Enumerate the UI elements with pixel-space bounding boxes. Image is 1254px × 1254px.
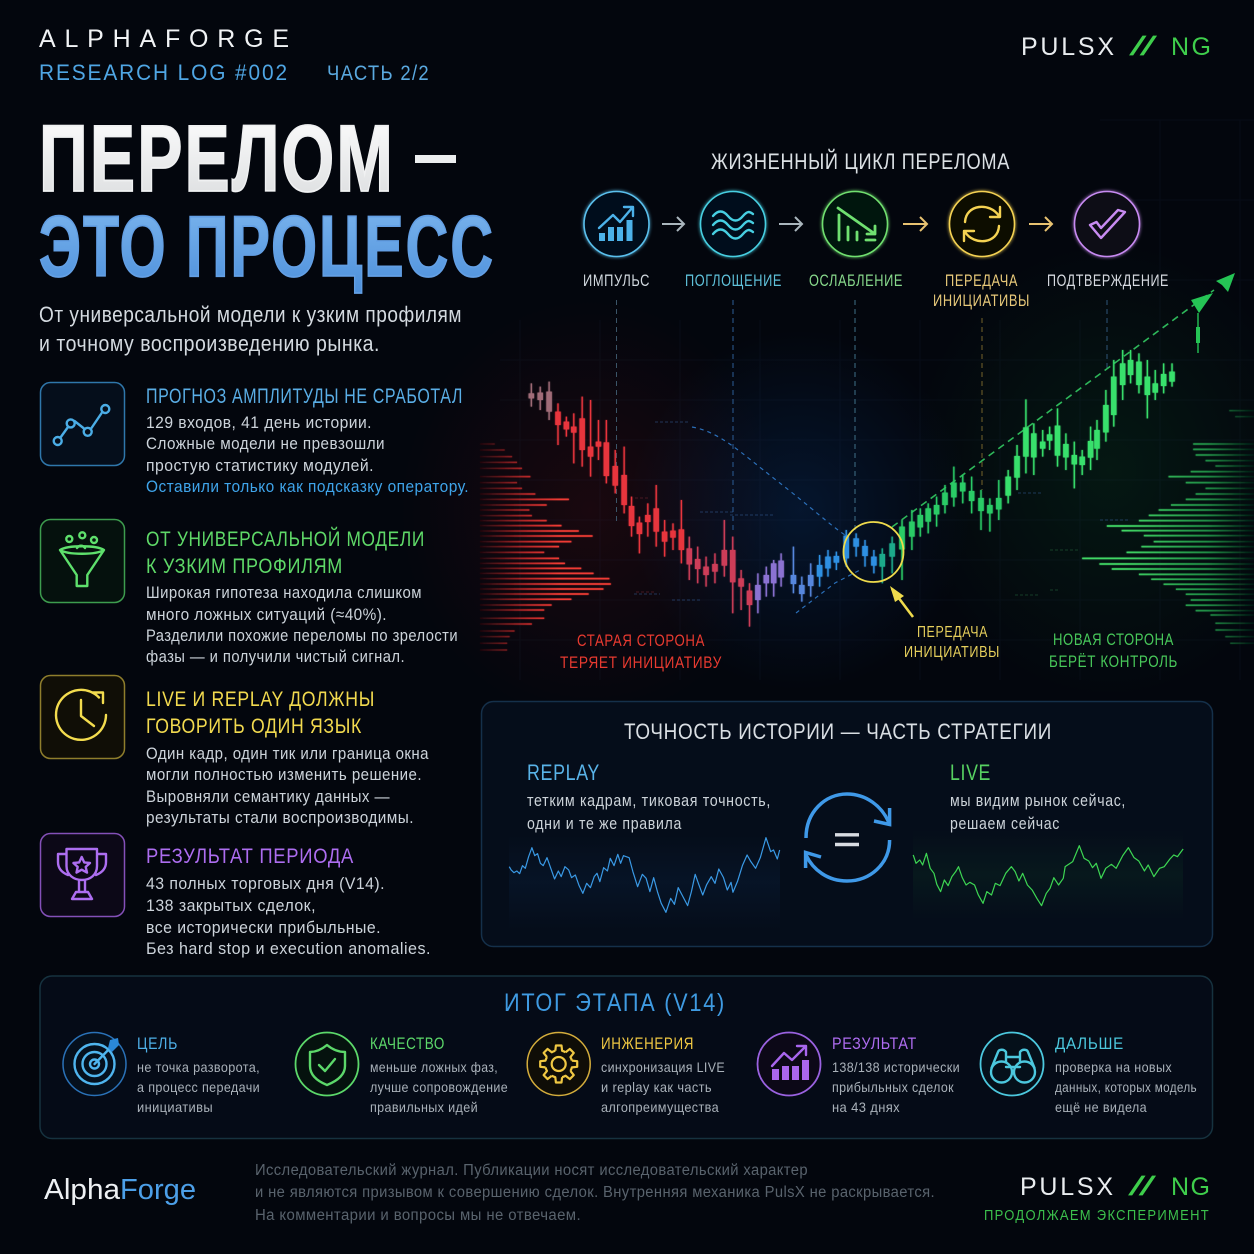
summary: next <box>980 1032 1197 1115</box>
brand name: ALPHAFORGE <box>39 25 289 53</box>
footer disclaimer: и не являются призывом к совершению сделок. Внутренняя механика PulsX не раскрывается. <box>255 1184 935 1201</box>
label: ИМПУЛЬС <box>583 271 650 290</box>
heading: ПРОГНОЗ АМПЛИТУДЫ НЕ СРАБОТАЛ <box>146 385 463 408</box>
panel: period result <box>40 834 431 958</box>
body text: Без hard stop и execution anomalies. <box>146 939 431 958</box>
heading: ГОВОРИТЬ ОДИН ЯЗЫК <box>146 715 362 738</box>
description <box>832 1059 960 1115</box>
body text <box>146 744 429 827</box>
body text: Выровняли семантику данных — <box>146 787 390 806</box>
icon: refresh <box>950 192 1014 256</box>
logo: PulsX NG bottom <box>1020 1171 1210 1201</box>
stage: weakening <box>809 192 903 290</box>
description: и replay как часть <box>601 1079 712 1095</box>
logo: PulsX NG bottom: PULSX <box>1020 1173 1113 1201</box>
icon: target <box>63 1032 126 1096</box>
heading: РЕЗУЛЬТАТ ПЕРИОДА <box>146 845 354 868</box>
description: синхронизация LIVE <box>601 1059 725 1075</box>
summary: quality <box>296 1032 508 1115</box>
label: handover: ИНИЦИАТИВЫ <box>904 644 1000 661</box>
icon: check <box>1074 192 1140 256</box>
panel heading: ТОЧНОСТЬ ИСТОРИИ — ЧАСТЬ СТРАТЕГИИ <box>624 719 1052 744</box>
panel: history accuracy <box>482 702 1212 946</box>
icon: falling bars <box>822 192 888 256</box>
replay column: одни и те же правила <box>527 814 682 833</box>
footer logo: AlphaForge: Forge <box>120 1174 196 1206</box>
panel: stage summary <box>40 976 1212 1138</box>
header: brand and log <box>39 25 430 85</box>
description <box>601 1059 725 1115</box>
main title: ПЕРЕЛОМ <box>39 106 395 212</box>
volume profile: green <box>1082 411 1254 643</box>
replay column: тетким кадрам, тиковая точность, <box>527 791 771 810</box>
icon: rising bars <box>584 192 649 256</box>
logo: PulsX NG top: // <box>1129 31 1157 61</box>
description: не точка разворота, <box>137 1059 260 1075</box>
stage guide lines <box>616 300 1107 532</box>
heading <box>146 527 425 578</box>
label: new side: НОВАЯ СТОРОНА <box>1053 630 1174 649</box>
icon: trophy <box>40 834 124 916</box>
subtitle: От универсальной модели к узким профилям <box>39 302 462 327</box>
body text: Широкая гипотеза находила слишком <box>146 583 422 602</box>
icon: growth chart <box>758 1032 820 1096</box>
label: ПОГЛОЩЕНИЕ <box>685 271 782 290</box>
chart: candlesticks with volume profiles <box>480 273 1254 650</box>
heading: К УЗКИМ ПРОФИЛЯМ <box>146 555 343 578</box>
icon: clock <box>40 676 124 758</box>
research log number: RESEARCH LOG #002 <box>39 60 289 85</box>
body text: 43 полных торговых дня (V14). <box>146 874 385 893</box>
stage: absorption <box>685 192 782 290</box>
body text <box>146 583 458 666</box>
title: РЕЗУЛЬТАТ <box>832 1034 917 1053</box>
summary heading: ИТОГ ЭТАПА (V14) <box>504 989 726 1017</box>
body text: все исторически прибыльные. <box>146 918 381 937</box>
body text: могли полностью изменить решение. <box>146 765 422 784</box>
title: ДАЛЬШЕ <box>1055 1034 1124 1053</box>
description: меньше ложных фаз, <box>370 1059 498 1075</box>
arrow <box>662 217 684 231</box>
arrow <box>903 217 927 231</box>
description: правильных идей <box>370 1099 478 1115</box>
heading <box>146 688 375 738</box>
body text: результаты стали воспроизводимы. <box>146 808 414 827</box>
faint readouts <box>634 422 1130 600</box>
live column: мы видим рынок сейчас, <box>950 791 1126 810</box>
arrow <box>779 217 802 231</box>
live column: LIVE <box>950 760 991 785</box>
label: old side <box>560 631 722 672</box>
description: данных, которых модель <box>1055 1079 1197 1095</box>
body text: много ложных ситуаций (≈40%). <box>146 605 387 624</box>
replay column: REPLAY <box>527 760 600 785</box>
body text: 138 закрытых сделок, <box>146 896 316 915</box>
description <box>137 1059 260 1115</box>
icon: line chart <box>40 382 124 466</box>
logo: PulsX NG bottom: NG <box>1171 1173 1210 1201</box>
label: ОСЛАБЛЕНИЕ <box>809 271 903 290</box>
description <box>370 1059 508 1115</box>
title: ИНЖЕНЕРИЯ <box>601 1034 694 1053</box>
replay line chart <box>509 835 780 930</box>
footer disclaimer: Исследовательский журнал. Публикации носят исследовательский характер <box>255 1162 808 1179</box>
replay column <box>527 760 771 833</box>
label: old side: СТАРАЯ СТОРОНА <box>577 631 705 650</box>
body text: 129 входов, 41 день истории. <box>146 413 372 432</box>
trend: blue dashed curve <box>692 427 860 613</box>
main title: ЭТО ПРОЦЕСС <box>39 199 495 295</box>
stage: confirmation <box>1047 192 1169 290</box>
subtitle <box>39 302 462 356</box>
logo: PulsX NG top: NG <box>1171 33 1211 61</box>
subtitle: и точному воспроизведению рынка. <box>39 331 380 356</box>
body text <box>146 874 431 958</box>
label: new side <box>1049 630 1178 671</box>
logo: PulsX NG top <box>1021 31 1211 61</box>
description: инициативы <box>137 1099 213 1115</box>
icon: sync with equals <box>806 794 890 881</box>
icon: waves <box>700 192 766 256</box>
arrow <box>1029 217 1052 231</box>
icon: shield <box>296 1032 358 1096</box>
lifecycle heading: ЖИЗНЕННЫЙ ЦИКЛ ПЕРЕЛОМА <box>711 149 1010 174</box>
label: handover: ПЕРЕДАЧА <box>917 624 988 641</box>
body text: Один кадр, один тик или граница окна <box>146 744 429 763</box>
body text: Оставили только как подсказку оператору. <box>146 477 469 496</box>
footer tagline: ПРОДОЛЖАЕМ ЭКСПЕРИМЕНТ <box>984 1207 1210 1224</box>
logo: PulsX NG bottom: // <box>1128 1171 1156 1201</box>
description: на 43 днях <box>832 1099 900 1115</box>
label <box>933 271 1030 310</box>
description: прибыльных сделок <box>832 1079 954 1095</box>
body text: простую статистику модулей. <box>146 456 374 475</box>
label: ПОДТВЕРЖДЕНИЕ <box>1047 271 1169 290</box>
label: new side: БЕРЁТ КОНТРОЛЬ <box>1049 652 1178 671</box>
callout: yellow handover circle <box>844 522 913 617</box>
panel: narrow profiles <box>40 520 458 666</box>
description <box>1055 1059 1197 1115</box>
footer disclaimer <box>255 1162 935 1224</box>
live column <box>950 760 1126 833</box>
main title <box>39 106 495 295</box>
volume profile: red <box>480 444 611 650</box>
summary: result <box>758 1032 960 1115</box>
stage: handover <box>933 192 1030 310</box>
live line chart <box>913 830 1183 920</box>
body text: фазы — и получили чистый сигнал. <box>146 647 405 666</box>
icon: funnel <box>40 520 124 602</box>
footer logo: AlphaForge <box>44 1174 196 1206</box>
panel: forecast failed <box>40 382 469 496</box>
footer disclaimer: На комментарии и вопросы мы не отвечаем. <box>255 1207 581 1224</box>
summary: goal <box>63 1032 260 1115</box>
label: ПЕРЕДАЧА <box>945 271 1018 290</box>
label: handover <box>904 624 1000 661</box>
candles <box>531 350 1172 627</box>
description: 138/138 исторически <box>832 1059 960 1075</box>
description: алгопреимущества <box>601 1099 719 1115</box>
trend arrowheads <box>1191 273 1235 353</box>
footer logo: AlphaForge: Alpha <box>44 1174 121 1206</box>
description: проверка на новых <box>1055 1059 1172 1075</box>
body text: Разделили похожие переломы по зрелости <box>146 626 458 645</box>
description: ещё не видела <box>1055 1099 1147 1115</box>
description: а процесс передачи <box>137 1079 260 1095</box>
logo: PulsX NG top: PULSX <box>1021 33 1114 61</box>
body text <box>146 413 469 496</box>
part label: ЧАСТЬ 2/2 <box>327 62 430 85</box>
heading: ОТ УНИВЕРСАЛЬНОЙ МОДЕЛИ <box>146 527 425 551</box>
stage: impulse <box>583 192 650 290</box>
heading: LIVE И REPLAY ДОЛЖНЫ <box>146 688 375 711</box>
label: old side: ТЕРЯЕТ ИНИЦИАТИВУ <box>560 653 722 672</box>
label: ИНИЦИАТИВЫ <box>933 291 1030 310</box>
icon: gear <box>527 1032 590 1096</box>
panel: live and replay <box>40 676 429 827</box>
icon: binoculars <box>980 1032 1044 1096</box>
summary: engineering <box>527 1032 725 1115</box>
live column: решаем сейчас <box>950 814 1060 833</box>
description: лучше сопровождение <box>370 1079 508 1095</box>
title: ЦЕЛЬ <box>137 1034 178 1053</box>
title: КАЧЕСТВО <box>370 1034 445 1053</box>
body text: Сложные модели не превзошли <box>146 434 385 453</box>
trend: green dashed line <box>892 290 1214 527</box>
